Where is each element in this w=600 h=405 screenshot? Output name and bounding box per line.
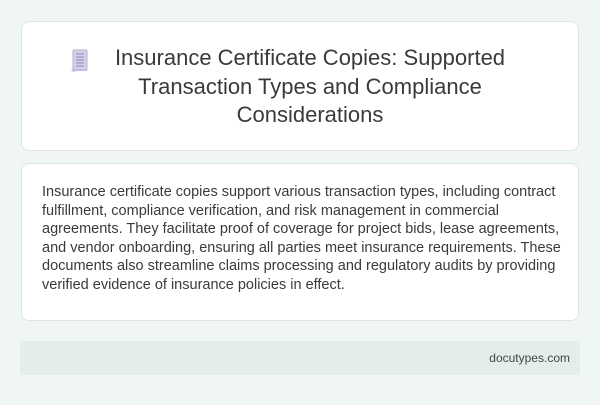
footer text: docutypes.com: [489, 351, 570, 365]
body card: [21, 163, 579, 321]
description text: Insurance certificate copies support various transaction types, including contract fulfillment, compliance verification, and risk management in commercial agreements. They facilitate proof of coverage for project bids, lease agreements, and vendor onboarding, ensuring all parties meet insurance requirements. These documents also streamline claims processing and regulatory audits by providing verified evidence of insurance policies in effect.: [42, 184, 561, 293]
title: Insurance Certificate Copies: Supported Transaction Types and Compliance Considerations: [115, 45, 505, 127]
header card: [21, 21, 579, 151]
footer: [20, 341, 580, 375]
icon: document: [71, 50, 88, 72]
